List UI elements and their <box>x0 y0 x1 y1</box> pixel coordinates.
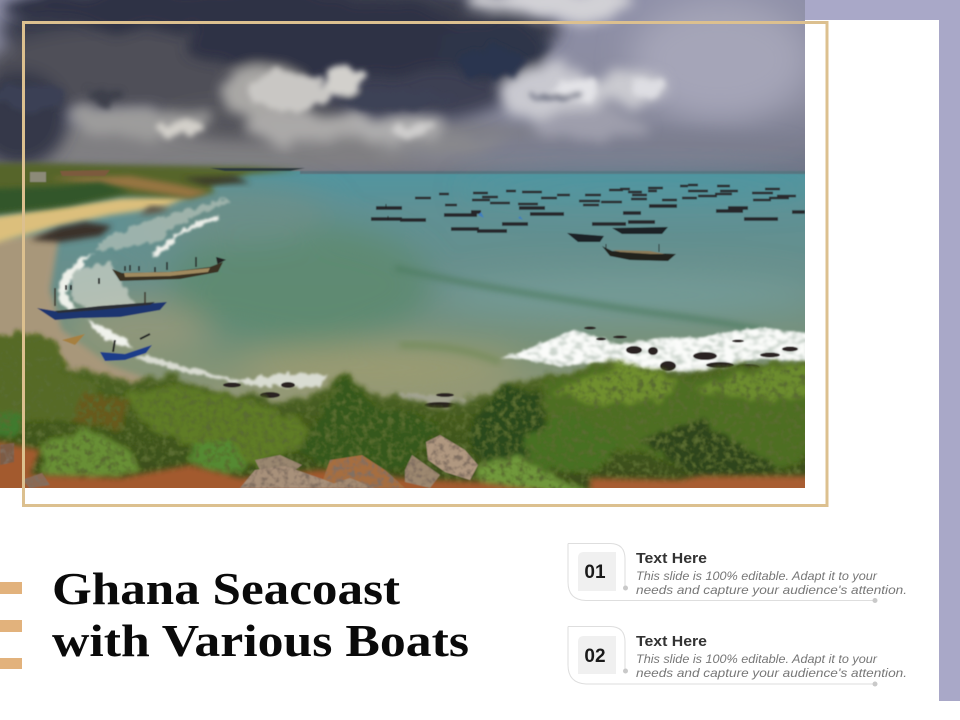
accent bars <box>0 582 22 669</box>
item 01 text: Text Here <box>636 550 707 567</box>
photo contents <box>0 0 805 488</box>
background panel: lavender top and right band <box>805 0 960 701</box>
wet sand and beach <box>0 194 186 385</box>
title: with Various Boats <box>52 615 469 666</box>
item 02 outline with dots <box>568 626 878 686</box>
photo: Ghana seacoast with boats <box>0 0 805 488</box>
headland, far left <box>0 163 305 214</box>
beached wooden boats <box>112 257 224 281</box>
item 01 text: This slide is 100% editable. Adapt it to your <box>636 569 878 583</box>
gold photo frame <box>24 22 827 506</box>
item 01 outline with dots <box>568 544 878 603</box>
beached blue boats <box>37 278 167 361</box>
surf and foam <box>58 198 815 412</box>
moored boats in the bay <box>371 185 805 261</box>
title <box>52 563 469 666</box>
item 01 <box>568 544 907 603</box>
item 02 number tile <box>578 636 616 674</box>
foreground bushes <box>0 327 805 488</box>
title: Ghana Seacoast <box>52 563 401 614</box>
item 01 number tile: 01 <box>584 562 606 583</box>
sky with storm clouds <box>0 0 815 176</box>
item 02 text: This slide is 100% editable. Adapt it to your <box>636 652 878 666</box>
eroded soil and rocks <box>0 434 805 488</box>
item 01 text: needs and capture your audience's attention. <box>636 583 907 597</box>
item 02 number tile: 02 <box>584 646 606 667</box>
sea <box>0 171 820 421</box>
shore rocks <box>223 326 798 408</box>
item 02 text: needs and capture your audience's attention. <box>636 666 907 680</box>
item 01 number tile <box>578 552 616 591</box>
item 02 text <box>636 633 907 680</box>
item 02 <box>568 626 907 686</box>
item 01 text <box>636 550 907 597</box>
item 02 text: Text Here <box>636 633 707 650</box>
